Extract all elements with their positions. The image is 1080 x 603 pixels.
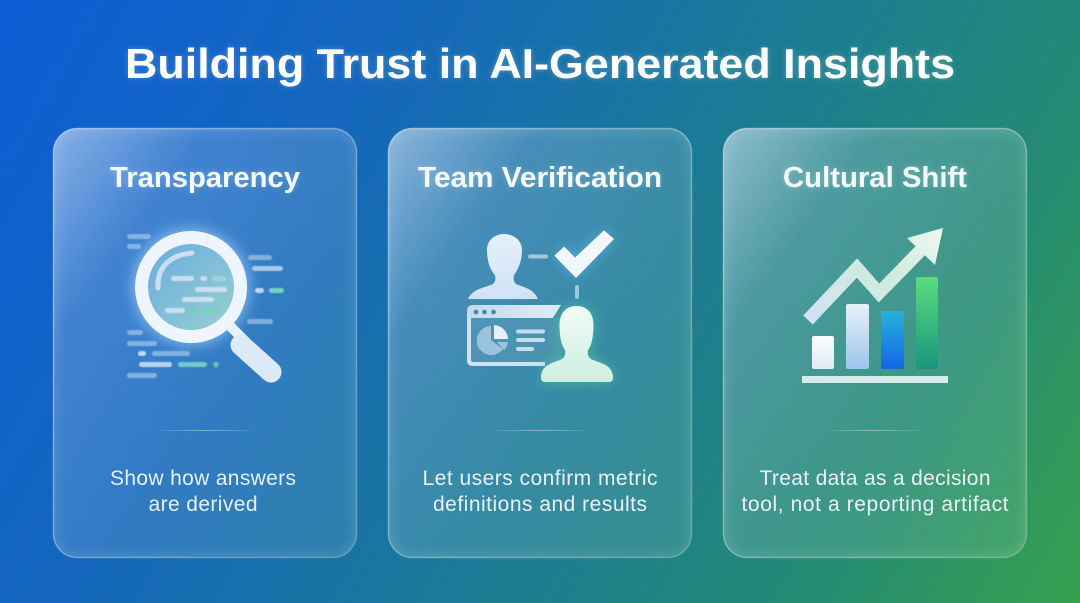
icon: rising bar chart with arrow [802,228,948,383]
person two [541,306,613,382]
dashboard window [467,305,561,364]
dashboard text lines [516,330,545,351]
card background [724,128,1026,558]
panel: Team Verification [388,128,692,558]
icon: magnifying glass over data lines [127,229,284,378]
body text: Show how answers [110,467,296,490]
connector dashes [528,254,579,299]
divider [830,430,919,431]
title: Building Trust in AI-Generated Insights [125,40,955,87]
body text: Treat data as a decision [760,467,990,490]
card background [54,128,356,558]
body text: are derived [148,493,258,516]
divider [161,430,250,431]
body text: tool, not a reporting artifact [742,493,1009,516]
baseline [802,376,948,383]
body text [422,467,658,516]
icon: people verifying dashboard [467,231,613,382]
bars [812,277,938,369]
panel: Cultural Shift [724,128,1026,558]
pie chart [477,325,508,355]
heading: Transparency: Transparency [110,162,300,194]
heading: Cultural Shift: Cultural Shift [783,162,967,194]
panel: Transparency [54,128,356,558]
body text: Let users confirm metric [422,467,658,490]
trend arrow [808,228,943,320]
body text [742,467,1009,516]
body text: definitions and results [433,493,647,516]
body text [110,467,296,516]
heading: Team Verification: Team Verification [418,162,662,194]
divider [496,430,585,431]
check mark [555,231,613,277]
person one [468,234,538,299]
card background [388,128,692,558]
